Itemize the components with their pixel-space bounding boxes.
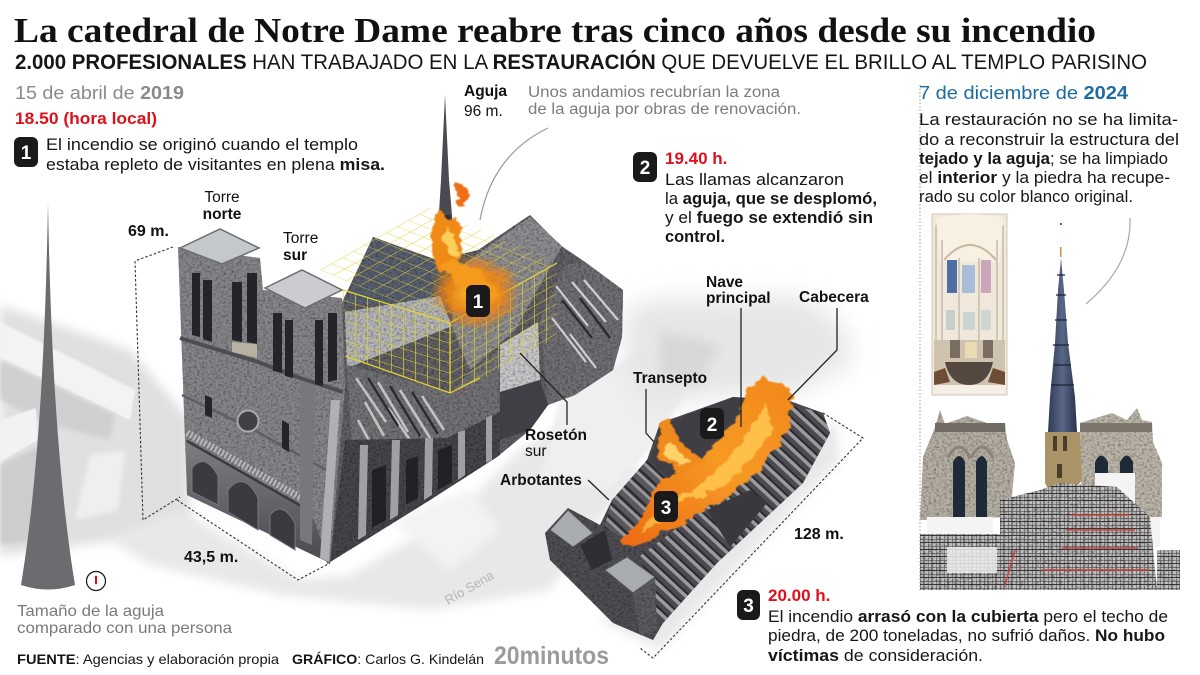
footer: source and credit: GRÁFICO: Carlos G. Kindelán [292,651,484,667]
apse [500,262,623,440]
step 1 description [46,136,385,174]
person in circle [86,572,106,590]
note: scaffolding: de la aguja por obras de renovación. [528,101,801,118]
step 2 time: 19.40 h. [665,149,727,168]
note: scaffolding [528,84,801,118]
label: spire height: Aguja [464,83,507,100]
step 2 block [633,149,877,246]
label: Transepto [633,370,707,442]
label: Torre sur: Torre [283,230,318,247]
badge 2: 2 [640,158,650,179]
badge 1 on cathedral [466,285,490,317]
south ribs [640,405,830,623]
restoration description: do a reconstruir la estructura del [919,131,1179,149]
tower tops [180,229,342,308]
date: 15 de abril de 2019: 15 de abril de 2019 [15,83,184,103]
buttress zone [347,350,500,450]
label: Río Sena: Río Sena [442,567,497,608]
dimension line: 43,5 m: 43,5 m. [184,549,238,566]
transept dark mass [650,397,760,480]
dimension line: 69 m [128,223,180,520]
label: Nave principal [706,274,771,427]
label: Arbotantes [500,472,609,500]
cathedral before collapse [178,95,623,564]
restoration description: La restauración no se ha limita- [919,111,1178,129]
dimension line: 69 m: 69 m. [128,223,169,240]
step 3 description: piedra, de 200 toneladas, no sufrió daños. No hubo [768,627,1165,645]
dark nave roof [345,237,442,305]
facade [178,247,345,563]
step 2 description: y el fuego se extendió sin [665,209,873,227]
dimension line: 128 m [640,413,863,658]
portals [192,462,295,550]
note: scaffolding: Unos andamios recubrían la zona [528,84,780,101]
footer: source and credit [17,651,484,667]
step 2 description: Las llamas alcanzaron [665,171,844,189]
restoration description: el interior y la piedra ha recupe- [919,169,1170,187]
step 2 description: la aguja, que se desplomó, [665,190,877,208]
step 3 description [768,608,1168,665]
south rose transept [500,322,540,392]
shadow [600,420,840,650]
light nave roof [345,296,452,368]
label: Nave principal: Nave [706,274,743,291]
label: Torre norte: Torre [204,189,240,206]
label: Rosetón sur: Rosetón [525,427,587,444]
tower windows [192,273,337,452]
rose window [238,410,258,432]
label: Torre sur: sur [283,247,307,264]
label: Transepto: Transepto [633,370,707,387]
dimension line: 43,5 m [177,500,330,580]
step 2 description [665,171,877,246]
label: Nave principal: principal [706,290,771,307]
badge 1: 1 [21,143,32,164]
north buttresses [604,460,670,540]
right panel: restored cathedral [919,83,1180,590]
arrow: scaffolding note to spire [480,128,548,220]
badge 3 [737,590,760,620]
label: Cabecera [788,289,869,400]
caption: comparado con una persona [17,620,232,637]
spire [436,95,456,262]
badge 2 on fire: 2 [707,415,717,436]
step 2 description: control. [665,228,725,246]
badge 3: 3 [743,596,754,617]
transept roof and crossing [452,217,562,370]
subtitle: 2.000 PROFESIONALES HAN TRABAJADO EN LA RESTAURACIÓN QUE DEVUELVE EL BRILLO AL TEMPLO PARISINO [15,50,1147,74]
caption: Tamaño de la aguja [17,603,164,620]
fire on spire [429,180,521,330]
right tower [1080,408,1162,517]
date: 7 de diciembre de 2024: 7 de diciembre de 2024 [919,83,1128,103]
step 1 description: estaba repleto de visitantes en plena misa. [46,156,385,174]
step 1 description: El incendio se originó cuando el templo [46,136,358,154]
facade bands [180,338,343,562]
main flames [622,376,792,546]
burning cathedral, roofless view [545,376,840,650]
badge 3 on fire: 3 [661,498,671,519]
facade lower storey [187,440,330,563]
silhouette [545,397,830,640]
label: Torre norte: norte [203,206,242,223]
badge 2 [633,152,657,182]
interior photo [932,214,1007,395]
time: 18.50: 18.50 (hora local) [15,109,157,128]
label: Cabecera: Cabecera [799,289,869,306]
caption [17,603,232,637]
step 3 block [737,586,1168,665]
badge 1 on cathedral: 1 [473,292,484,313]
scaffolding grid [320,208,557,393]
logo: 20minutos: 20minutos [494,642,609,670]
step 3 time: 20.00 h. [768,586,830,605]
restoration description: tejado y la aguja; se ha limpiado [919,150,1168,168]
label: Arbotantes: Arbotantes [500,472,582,489]
divider [919,85,921,590]
footer: source and credit: FUENTE: Agencias y elaboración propia [17,651,279,667]
step 3 description: víctimas de consideración. [768,647,983,665]
badge 1 [14,137,38,167]
scaffolding [920,483,1180,590]
label: spire height: 96 m. [464,103,503,120]
spire silhouette [21,202,75,590]
restoration description: rado su color blanco original. [919,188,1133,206]
label: Rosetón sur [520,353,587,460]
background: aerial city map in grey [0,295,851,610]
step 3 description: El incendio arrasó con la cubierta pero el techo de [768,608,1168,626]
lower nave chapels [330,412,500,562]
nave and apse body [300,215,623,564]
left tower [920,410,1015,520]
title: La catedral de Notre Dame reabre tras cinco años desde su incendio [14,11,1096,50]
restoration description [919,111,1179,206]
arrow curve [1086,218,1130,304]
new spire [1045,223,1082,493]
towers of west facade [550,510,657,635]
central dark bay [707,490,767,547]
dimension line: 128 m: 128 m. [794,526,844,543]
badge 3 on fire [654,491,678,522]
scale comparison: spire vs person [17,202,232,637]
step 1 text block [14,136,385,174]
label: Rosetón sur: sur [525,443,547,460]
badge 2 on fire [700,408,724,439]
